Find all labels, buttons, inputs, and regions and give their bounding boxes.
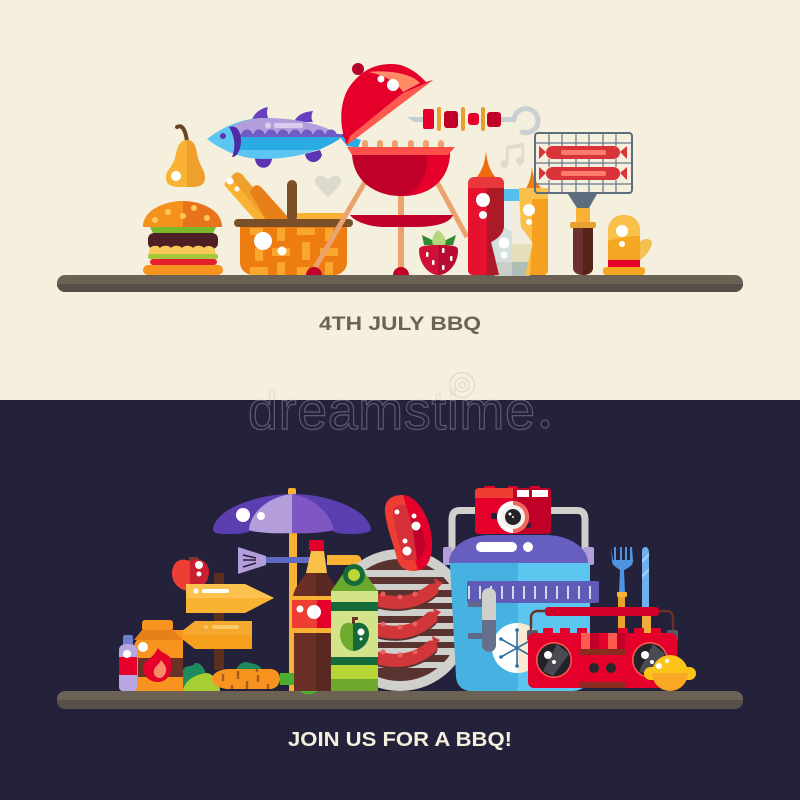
icon: boombox radio <box>527 607 678 688</box>
watermark: dreamstime <box>248 381 535 441</box>
icon: juice carton <box>331 564 378 691</box>
icon: music note <box>500 143 524 168</box>
icon: fish <box>207 107 361 168</box>
icon: strawberry <box>419 230 458 275</box>
icon: lemon <box>644 655 696 691</box>
icon: sausage grill basket <box>535 133 632 275</box>
icon: leafy greens <box>183 662 262 691</box>
icon: skewer <box>407 107 538 133</box>
icon: oven mitt <box>603 215 652 275</box>
icon: ketchup bottle <box>468 151 504 275</box>
heading: 4th July BBQ: 4TH JULY BBQ <box>319 314 481 335</box>
icon: sauce jar with flame <box>134 620 183 691</box>
icon: cola bottle <box>292 540 338 691</box>
panel: bottom shelf <box>57 691 743 709</box>
panel: bottom navy background <box>0 400 800 800</box>
icon: spatula <box>238 547 310 574</box>
icon: heart <box>315 176 341 197</box>
icon: glass bottle <box>491 189 533 276</box>
icon: yellow bracket behind bottle <box>327 555 362 565</box>
icon: round grill with sausages <box>356 549 456 691</box>
icon: carrot <box>212 666 329 694</box>
icon: kettle grill <box>306 63 467 275</box>
heading: Join us for a BBQ: JOIN US FOR A BBQ! <box>288 729 512 751</box>
icon: beach umbrella <box>213 488 371 691</box>
icon: cooler <box>443 510 599 691</box>
icon: fork <box>611 547 633 635</box>
panel: top shelf <box>57 275 743 292</box>
icon: pear <box>166 126 205 187</box>
icon: knife <box>642 547 651 635</box>
icon: camera <box>475 486 551 534</box>
icon: signpost <box>177 573 274 670</box>
panel: top cream background <box>0 0 800 400</box>
icon: apple <box>172 557 209 591</box>
icon: mustard bottle <box>519 167 548 275</box>
icon: small bottle <box>119 635 137 691</box>
icon: steak <box>385 495 432 571</box>
icon: burger <box>143 201 223 275</box>
icon: picnic basket with baguettes <box>225 172 353 275</box>
